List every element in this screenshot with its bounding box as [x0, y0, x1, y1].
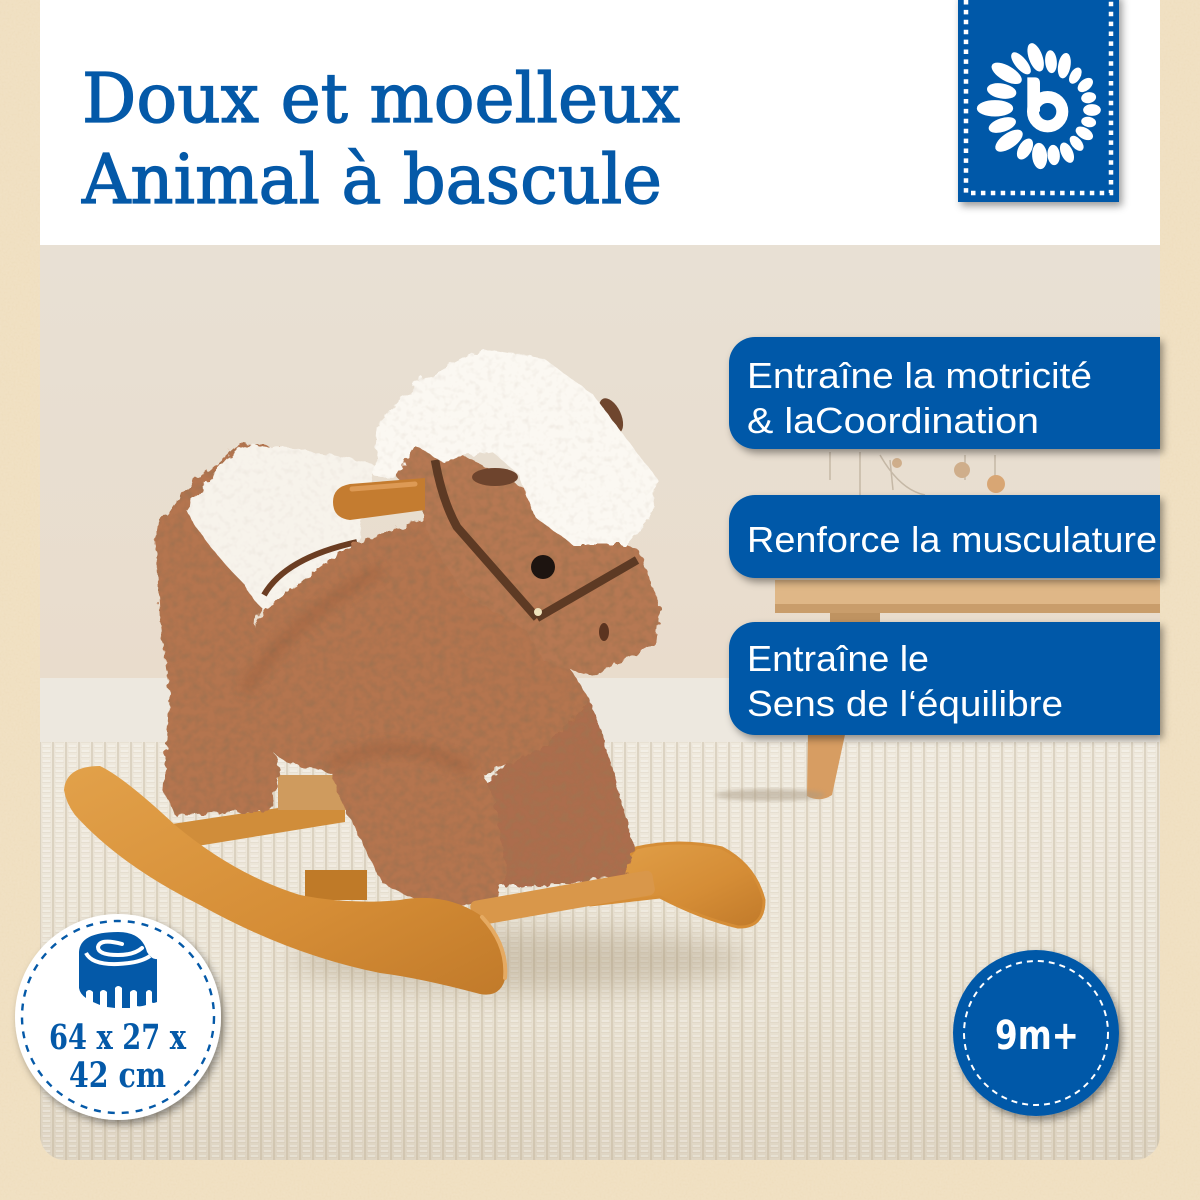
horse second leg	[480, 700, 635, 885]
age badge	[953, 950, 1119, 1116]
dimensions badge	[15, 914, 221, 1120]
dimensions text: 64 x 27 x	[49, 1017, 187, 1058]
title: Animal à bascule	[81, 141, 662, 220]
panel: équilibre: Entraîne le	[747, 638, 929, 679]
fur shading	[245, 570, 470, 770]
front rocker	[64, 766, 656, 995]
logo flower	[978, 42, 1100, 169]
panel: motricité: & laCoordination	[747, 400, 1039, 441]
dimensions text	[49, 1017, 187, 1096]
panel: équilibre	[729, 622, 1160, 735]
panel: motricité: Entraîne la motricité	[747, 355, 1092, 396]
panel: équilibre: Sens de l‘équilibre	[747, 683, 1063, 724]
nostril	[599, 623, 609, 641]
panel: musculature: Renforce la musculature	[747, 519, 1157, 560]
handle	[333, 478, 425, 520]
saddle strap	[264, 542, 357, 595]
eye	[531, 555, 555, 579]
feature panels	[729, 337, 1160, 735]
product photo	[40, 245, 1160, 1162]
wall	[40, 245, 1160, 685]
horse body and front leg	[238, 520, 585, 902]
rear rocker	[172, 775, 764, 927]
icon: tape measure	[79, 932, 157, 1008]
wooden toy table	[715, 452, 1160, 801]
horse head	[397, 443, 657, 673]
carpet	[40, 742, 1160, 1162]
horse rump	[154, 442, 281, 817]
skirting board	[40, 678, 1160, 744]
mane	[377, 352, 653, 540]
rocking horse shadow	[290, 928, 750, 992]
title	[81, 60, 680, 220]
saddle	[186, 445, 375, 612]
dimensions text: 42 cm	[69, 1055, 166, 1096]
age badge: 9m+	[995, 1013, 1079, 1059]
white header band	[40, 0, 1160, 246]
bridle	[435, 460, 637, 618]
panel: motricité	[729, 337, 1160, 449]
logo label	[958, 0, 1119, 202]
near ear	[472, 468, 518, 486]
title: Doux et moelleux	[82, 60, 680, 139]
far ear	[600, 398, 624, 432]
panel: musculature	[729, 495, 1160, 578]
